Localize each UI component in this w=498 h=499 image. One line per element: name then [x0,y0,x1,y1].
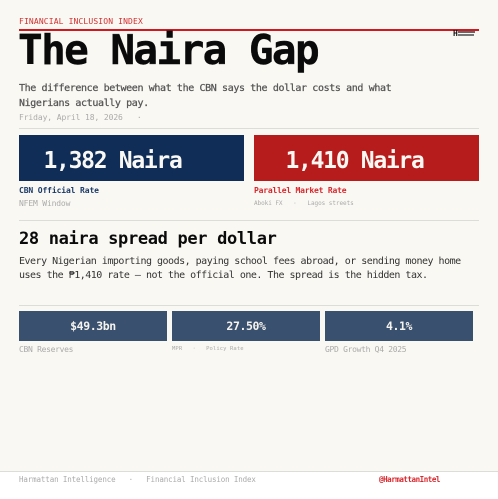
growth value: 4.1% [386,319,412,333]
policy rate value: 27.50% [226,319,266,333]
date line: Friday, April 18, 2026 · [19,113,142,122]
reserves value: $49.3bn [70,319,116,333]
stat: GDP growth [325,311,473,341]
spread explanation: Every Nigerian importing goods, paying school fees abroad, or sending money home uses the ₱1,410 rate — not the official one. The spread is the hidden tax. [19,256,461,281]
reserves label: CBN Reserves [19,344,73,354]
footer source: Harmattan Intelligence · Financial Inclusion Index [19,475,256,484]
official rate source: NFEM Window [19,199,70,208]
spread heading: 28 naira spread per dollar [19,229,277,249]
panel: parallel market rate [254,135,479,181]
parallel rate value: 1,410 Naira [286,148,424,174]
stat: policy rate [172,311,320,341]
subtitle: The difference between what the CBN says the dollar costs and what Nigerians actually pay. [19,83,391,108]
official rate value: 1,382 Naira [44,148,182,174]
policy rate label: MPR · Policy Rate [172,346,244,352]
parallel rate source: Aboki FX · Lagos streets [254,200,354,206]
stat: reserves [19,311,167,341]
official rate label: CBN Official Rate [19,186,99,195]
parallel rate label: Parallel Market Rate [254,186,346,195]
footer handle: @HarmattanIntel [379,475,440,484]
title: The Naira Gap [18,26,318,74]
eyebrow label: FINANCIAL INCLUSION INDEX [19,16,143,26]
panel: CBN official rate [19,135,244,181]
growth label: GPD Growth Q4 2025 [325,344,406,354]
